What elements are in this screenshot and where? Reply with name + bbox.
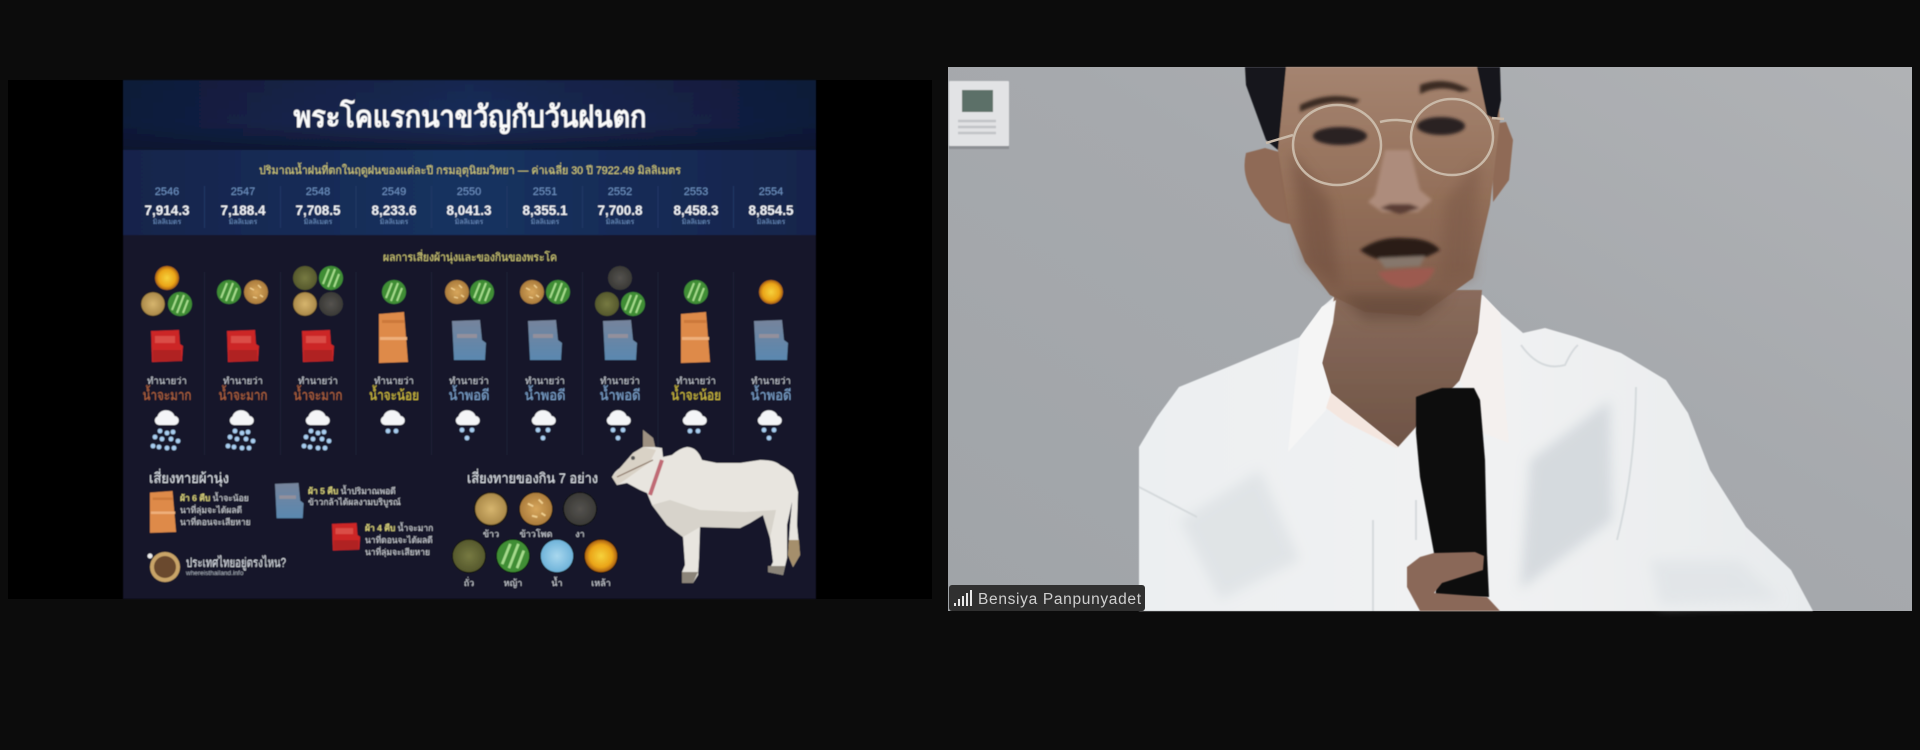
forecast labels: น้ำจะมาก — [142, 385, 192, 403]
shirt collar — [1288, 296, 1509, 452]
legend: six span cloth: นาที่ดอนจะเสียหาย — [180, 516, 251, 527]
ears — [1244, 148, 1290, 224]
forecast labels: น้ำจะมาก — [294, 385, 342, 403]
head — [1244, 67, 1513, 316]
rainfall year columns: 8,854.5 — [748, 203, 794, 218]
legend: six span cloth: นาที่ลุ่มจะได้ผลดี — [180, 504, 242, 516]
rainfall year columns: 2548 — [306, 186, 330, 198]
food legend heading: เสี่ยงทายของกิน 7 อย่าง — [467, 469, 598, 486]
forecast labels: ทำนายว่า — [525, 376, 565, 387]
forecast labels: ทำนายว่า — [676, 376, 716, 387]
legend: four span cloth: นาที่ลุ่มจะเสียหาย — [365, 546, 430, 558]
logo: where is Thailand — [148, 552, 286, 582]
food circles — [452, 492, 618, 573]
rainfall year columns: 7,188.4 — [220, 203, 266, 218]
legend: six span cloth — [150, 491, 251, 533]
forecast labels: ทำนายว่า — [449, 376, 489, 387]
rainfall year columns — [144, 186, 794, 226]
shirt folds — [1180, 400, 1780, 605]
rainfall year columns: 2552 — [608, 186, 632, 198]
food labels: งา — [575, 529, 585, 539]
participant name tag — [949, 585, 1145, 611]
hair — [1245, 67, 1501, 150]
panel: rainfall band — [123, 150, 816, 235]
food labels: ข้าวโพด — [520, 529, 553, 539]
rainfall year columns: 8,355.1 — [522, 203, 568, 218]
person speaking — [1139, 67, 1813, 611]
rainfall year columns: มิลลิเมตร — [606, 218, 634, 226]
forecast labels: ทำนายว่า — [298, 376, 338, 387]
rainfall subtitle: ปริมาณน้ำฝนที่ตกในฤดูฝนของแต่ละปี กรมอุตุนิยมวิทยา — ค่าเฉลี่ย 30 ปี 7922.49 มิลลิเมตร — [259, 162, 681, 177]
hand — [1407, 552, 1500, 611]
rainfall year columns: 2546 — [155, 186, 179, 198]
neck — [1322, 290, 1482, 447]
glasses — [1266, 99, 1504, 185]
forecast labels: น้ำพอดี — [750, 385, 792, 403]
microphone — [1416, 388, 1489, 597]
forecast labels — [142, 376, 792, 403]
legend: four span cloth: ผ้า 4 คืบ น้ำจะมาก — [365, 522, 433, 533]
rain icons by year — [151, 410, 782, 450]
legend: five span cloth — [275, 483, 401, 518]
rainfall year columns: 8,233.6 — [371, 203, 417, 218]
food labels: ข้าว — [483, 529, 499, 539]
logo: where is Thailand: whereisthailand.info — [185, 570, 244, 577]
food legend — [452, 469, 618, 588]
cloth legend heading: เสี่ยงทายผ้านุ่ง — [149, 469, 229, 487]
forecast labels: ทำนายว่า — [751, 376, 791, 387]
rainfall year columns: 2549 — [382, 186, 406, 198]
results heading: ผลการเสี่ยงผ้านุ่งและของกินของพระโค — [383, 249, 557, 264]
legend: five span cloth: ข้าวกล้าได้ผลงามบริบูรณ์ — [308, 497, 401, 508]
panel: shared slide — [8, 80, 932, 599]
rainfall year columns: มิลลิเมตร — [757, 218, 785, 226]
face — [1277, 67, 1500, 316]
food icons by year — [141, 266, 783, 316]
forecast labels: น้ำจะน้อย — [369, 385, 419, 403]
legend: five span cloth: ผ้า 5 คืบ น้ำปริมาณพอดี — [308, 485, 396, 496]
rainfall year columns: มิลลิเมตร — [380, 218, 408, 226]
rainfall year columns: 2547 — [231, 186, 255, 198]
rainfall year columns: 2550 — [457, 186, 481, 198]
forecast labels: น้ำจะน้อย — [671, 385, 721, 403]
cloth icons by year — [151, 312, 788, 363]
panel: infographic — [123, 80, 816, 599]
participant name tag: Bensiya Panpunyadet — [978, 591, 1142, 608]
forecast labels: ทำนายว่า — [147, 376, 187, 387]
forecast labels: น้ำจะมาก — [218, 385, 268, 403]
food labels: หญ้า — [504, 578, 522, 588]
cloth legend — [149, 469, 433, 558]
legend: six span cloth: ผ้า 6 คืบ น้ำจะน้อย — [180, 492, 249, 503]
rainfall year columns: มิลลิเมตร — [153, 218, 181, 226]
logo: where is Thailand: ประเทศไทยอยู่ตรงไหน? — [186, 555, 286, 571]
rainfall year columns: 7,708.5 — [295, 203, 341, 218]
royal ox illustration — [612, 430, 800, 583]
rainfall year columns: 8,041.3 — [446, 203, 492, 218]
forecast labels: น้ำพอดี — [448, 385, 490, 403]
rainfall year columns: 7,914.3 — [144, 203, 190, 218]
food labels: ถั่ว — [464, 576, 474, 588]
rainfall year columns: 2553 — [684, 186, 708, 198]
rainfall year columns: 2554 — [759, 186, 783, 198]
facial features — [1290, 81, 1480, 320]
food labels — [464, 529, 611, 588]
panel: video feed — [948, 67, 1912, 611]
food labels: เหล้า — [591, 578, 611, 588]
food labels: น้ำ — [551, 576, 563, 588]
rainfall year columns: มิลลิเมตร — [531, 218, 559, 226]
rainfall year columns: 7,700.8 — [597, 203, 643, 218]
shirt — [1139, 295, 1813, 611]
legend: four span cloth: นาที่ดอนจะได้ผลดี — [365, 534, 433, 545]
signal bars — [954, 590, 972, 606]
forecast labels: ทำนายว่า — [374, 376, 414, 387]
legend: four span cloth — [332, 522, 433, 558]
rainfall year columns: 2551 — [533, 186, 557, 198]
forecast labels: น้ำพอดี — [524, 385, 566, 403]
rainfall year columns: มิลลิเมตร — [455, 218, 483, 226]
wall thermostat — [949, 81, 1009, 149]
rainfall year columns: มิลลิเมตร — [304, 218, 332, 226]
rainfall year columns: 8,458.3 — [673, 203, 719, 218]
forecast labels: น้ำพอดี — [600, 385, 640, 403]
forecast labels: ทำนายว่า — [600, 376, 640, 387]
rainfall year columns: มิลลิเมตร — [682, 218, 710, 226]
panel: title header — [123, 80, 816, 150]
rainfall year columns: มิลลิเมตร — [229, 218, 257, 226]
title: พระโคแรกนาขวัญกับวันฝนตก — [294, 98, 646, 135]
wall background — [948, 67, 1912, 611]
forecast labels: ทำนายว่า — [223, 376, 263, 387]
